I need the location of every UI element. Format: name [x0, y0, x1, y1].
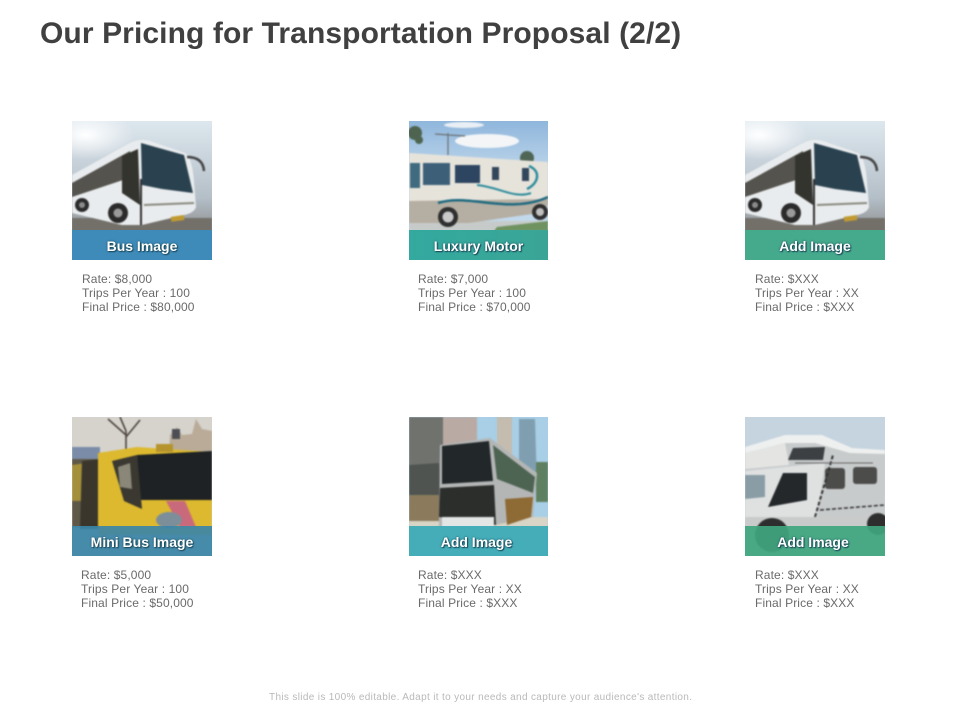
banner label: Luxury Motor: [434, 238, 523, 254]
pricing text: Rate: $7,000: [418, 272, 488, 286]
panel: add image top right: [745, 121, 885, 314]
banner label: Add Image: [441, 534, 512, 550]
banner label: Add Image: [779, 238, 851, 254]
banner label: Add Image: [777, 534, 849, 550]
pricing text: Rate: $XXX: [418, 568, 482, 582]
photo: double-decker bus: [409, 417, 548, 556]
panel: add image bottom right: [745, 417, 885, 610]
pricing text: Rate: $XXX: [755, 272, 819, 286]
title: Our Pricing for Transportation Proposal (2/2): [40, 17, 681, 50]
footer note: This slide is 100% editable. Adapt it to your needs and capture your audience's attention.: [269, 692, 692, 703]
pricing text: [418, 568, 522, 610]
pricing text: Trips Per Year : 100: [82, 286, 190, 300]
photo: white coach bus: [72, 121, 212, 260]
pricing text: [418, 272, 531, 314]
pricing text: Rate: $XXX: [755, 568, 819, 582]
panel: bus image: [72, 121, 212, 314]
photo: yellow mini bus: [72, 417, 212, 556]
pricing text: Final Price : $50,000: [81, 596, 194, 610]
pricing text: Final Price : $XXX: [418, 596, 518, 610]
pricing text: Trips Per Year : XX: [755, 582, 859, 596]
pricing text: Trips Per Year : XX: [755, 286, 859, 300]
pricing text: Final Price : $80,000: [82, 300, 195, 314]
pricing text: [82, 272, 195, 314]
photo: luxury motorhome: [409, 121, 548, 260]
pricing text: [81, 568, 194, 610]
photo: camper van: [745, 417, 885, 556]
pricing text: Final Price : $XXX: [755, 300, 855, 314]
pricing text: Final Price : $XXX: [755, 596, 855, 610]
panel: luxury motor: [409, 121, 548, 314]
pricing text: [755, 272, 859, 314]
panel: add image bottom centre: [409, 417, 548, 610]
pricing text: Final Price : $70,000: [418, 300, 531, 314]
photo: white coach bus: [745, 121, 885, 260]
pricing text: Trips Per Year : 100: [418, 286, 526, 300]
banner label: Mini Bus Image: [91, 534, 193, 550]
pricing text: Trips Per Year : 100: [81, 582, 189, 596]
banner label: Bus Image: [107, 238, 177, 254]
panel: mini bus image: [72, 417, 212, 610]
pricing text: Trips Per Year : XX: [418, 582, 522, 596]
pricing text: Rate: $8,000: [82, 272, 152, 286]
pricing text: [755, 568, 859, 610]
pricing text: Rate: $5,000: [81, 568, 151, 582]
